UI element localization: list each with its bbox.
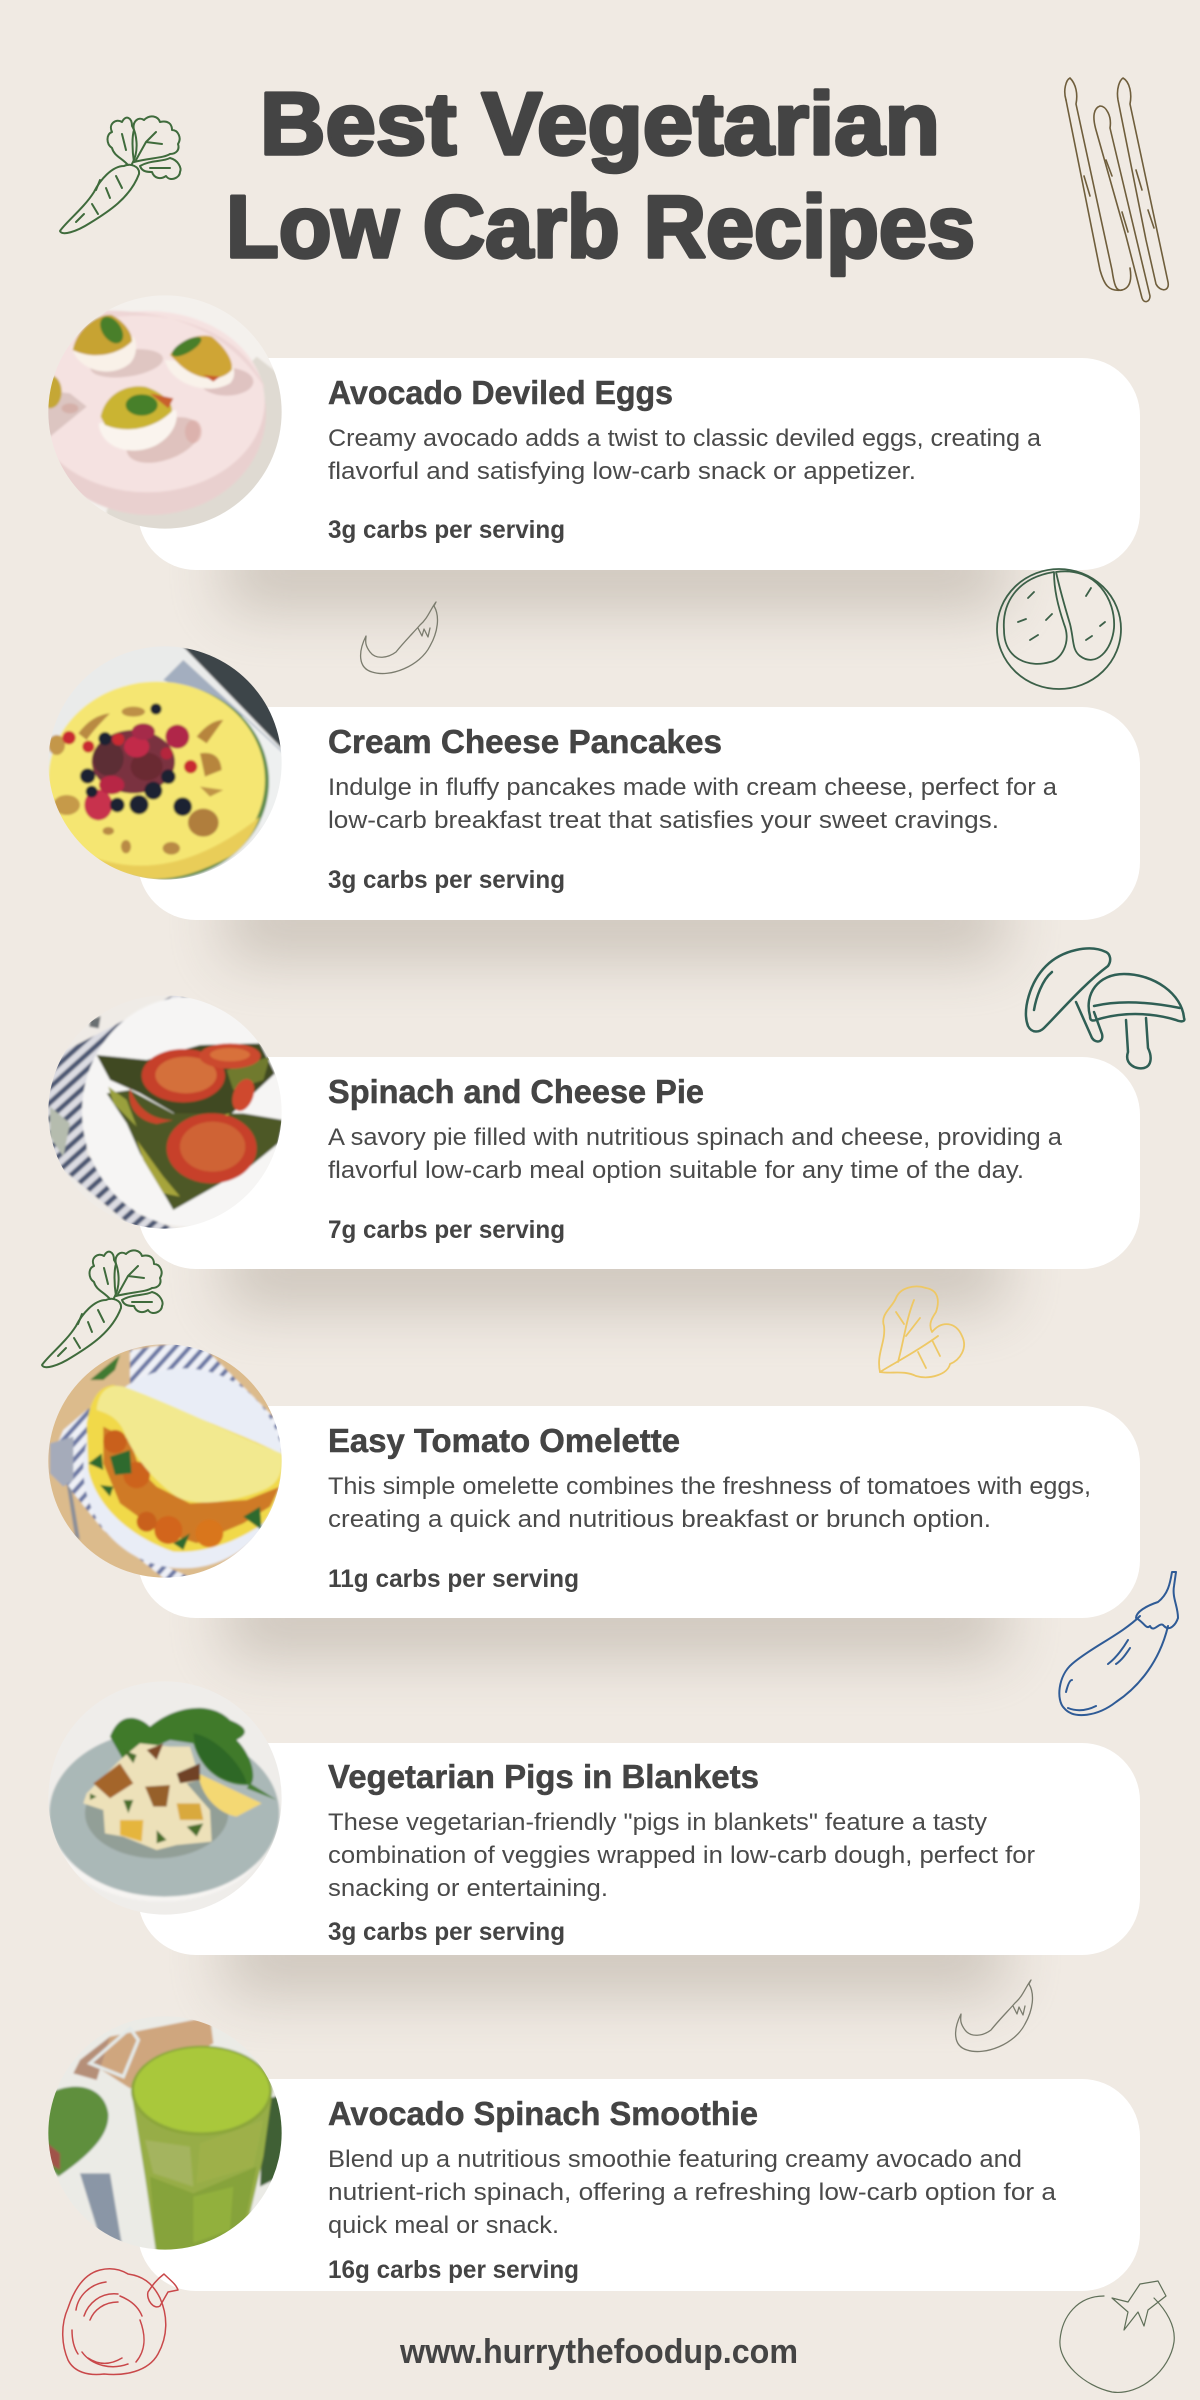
icon: carrot top left xyxy=(60,116,181,233)
icon: red bell pepper xyxy=(63,2269,178,2374)
panel: spinach and cheese pie: Spinach and Cheese Pie xyxy=(328,1073,704,1110)
panel: avocado spinach smoothie: Avocado Spinach Smoothie xyxy=(328,2095,758,2132)
panel: cream cheese pancakes: low-carb breakfast treat that satisfies your sweet cravings. xyxy=(328,807,999,834)
panel: cream cheese pancakes xyxy=(138,707,1140,920)
icon: yellow lettuce xyxy=(879,1286,964,1377)
panel: cream cheese pancakes: Cream Cheese Pancakes xyxy=(328,723,722,760)
card shadows xyxy=(225,530,1005,1995)
panel: vegetarian pigs in blankets: snacking or entertaining. xyxy=(328,1875,608,1902)
panel: avocado spinach smoothie: Blend up a nutritious smoothie featuring creamy avocado and xyxy=(328,2146,1022,2173)
icon: mushrooms xyxy=(1026,948,1184,1068)
panel: spinach and cheese pie: A savory pie filled with nutritious spinach and cheese, providing a xyxy=(328,1124,1063,1151)
icon: small chili top xyxy=(361,602,437,674)
panel: spinach and cheese pie xyxy=(138,1057,1140,1269)
footer website: www.hurrythefoodup.com xyxy=(399,2333,798,2371)
icon: asparagus xyxy=(1065,78,1168,302)
panel: cream cheese pancakes: Indulge in fluffy pancakes made with cream cheese, perfect for a xyxy=(328,774,1058,801)
photo: spinach and cheese pie xyxy=(48,996,282,1229)
panel: easy tomato omelette: 11g carbs per serving xyxy=(328,1565,579,1593)
icon: pepper half xyxy=(997,569,1121,689)
panel: avocado spinach smoothie: 16g carbs per serving xyxy=(328,2256,579,2284)
icon: tomato outline xyxy=(1060,2281,1174,2392)
icon: blue eggplant xyxy=(1059,1572,1178,1715)
photo: deviled eggs xyxy=(48,296,282,529)
panel: avocado spinach smoothie: quick meal or snack. xyxy=(328,2212,559,2239)
panel: vegetarian pigs in blankets xyxy=(138,1743,1140,1955)
panel: avocado deviled eggs: flavorful and satisfying low-carb snack or appetizer. xyxy=(328,458,916,485)
panel: avocado deviled eggs: Creamy avocado adds a twist to classic deviled eggs, creating a xyxy=(328,425,1042,452)
icon: small chili lower xyxy=(956,1980,1032,2052)
title: Low Carb Recipes xyxy=(226,177,975,276)
panel: vegetarian pigs in blankets: Vegetarian Pigs in Blankets xyxy=(328,1758,759,1795)
title: Best Vegetarian xyxy=(260,74,940,173)
panel: avocado spinach smoothie xyxy=(138,2079,1140,2291)
panel: spinach and cheese pie: 7g carbs per serving xyxy=(328,1216,565,1244)
panel: spinach and cheese pie: flavorful low-carb meal option suitable for any time of the day. xyxy=(328,1157,1024,1184)
panel: vegetarian pigs in blankets: combination of veggies wrapped in low-carb dough, perfect for xyxy=(328,1842,1035,1869)
panel: cream cheese pancakes: 3g carbs per serving xyxy=(328,866,565,894)
photo: vegetarian pigs in blankets xyxy=(49,1688,282,1914)
panel: easy tomato omelette xyxy=(138,1406,1140,1618)
panel: easy tomato omelette: This simple omelette combines the freshness of tomatoes with eggs, xyxy=(328,1473,1091,1500)
title xyxy=(226,74,975,276)
panel: avocado deviled eggs: 3g carbs per serving xyxy=(328,516,565,544)
panel: avocado deviled eggs: Avocado Deviled Eggs xyxy=(328,374,673,411)
photo: avocado spinach smoothie xyxy=(48,2020,282,2250)
panel: avocado deviled eggs xyxy=(138,358,1140,570)
panel: easy tomato omelette: creating a quick and nutritious breakfast or brunch option. xyxy=(328,1506,991,1533)
icon: carrot mid left xyxy=(42,1250,163,1367)
panel: vegetarian pigs in blankets: 3g carbs per serving xyxy=(328,1918,565,1946)
photo: omelette xyxy=(43,1337,287,1587)
panel: avocado spinach smoothie: nutrient-rich spinach, offering a refreshing low-carb option for a xyxy=(328,2179,1057,2206)
panel: easy tomato omelette: Easy Tomato Omelette xyxy=(328,1422,680,1459)
photo: pancakes xyxy=(43,640,287,883)
panel: vegetarian pigs in blankets: These vegetarian-friendly "pigs in blankets" feature a tasty xyxy=(328,1809,987,1836)
